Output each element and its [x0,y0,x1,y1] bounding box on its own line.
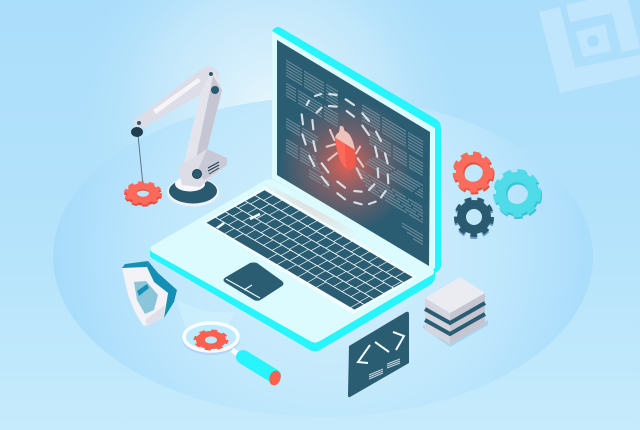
floor ellipse [53,97,593,417]
hanging gear [126,182,160,205]
shield top band [122,261,148,268]
magnifier [177,300,283,387]
keyboard [203,187,417,314]
server top [425,277,485,313]
lens [184,323,238,351]
server left side [425,298,450,344]
shield [122,261,177,326]
magnifier neck [232,350,246,359]
motor housing [178,149,227,187]
keyboard tray [203,187,417,314]
server shadow [423,320,488,347]
wrist [131,127,143,137]
laptop [150,27,441,352]
screen bezel [272,31,435,272]
dark gear [456,200,492,236]
bug icon [327,126,363,178]
screen back edge [272,27,441,273]
lens gear [196,331,226,349]
code symbol [358,332,404,363]
key notches [217,214,260,228]
keys [211,193,408,307]
forearm [134,66,221,129]
screen panel [277,40,430,266]
gears [455,154,540,236]
handle cap [267,369,283,387]
code card [348,312,409,397]
shield side [147,261,177,318]
magnifier shadow [182,323,240,355]
base top [150,179,434,342]
server stripes [425,303,485,334]
arm joints [211,86,219,94]
shield front [122,267,168,326]
robot arm [126,66,227,206]
upper arm [182,70,222,178]
base bottom edge [150,248,435,352]
cyan gear [496,172,540,216]
shield inner panel [134,281,158,314]
base glow [271,186,350,233]
watermark logo [539,0,640,93]
light beam [177,300,235,327]
shield inner stripe [137,284,149,296]
code caption lines [369,359,400,379]
target rings [302,94,388,204]
server stack [423,277,488,347]
code lines [286,59,423,245]
screen glow [282,101,410,226]
handle [243,357,274,376]
coral gear [455,154,492,192]
server right side [450,293,485,344]
robot base [167,178,219,206]
cable [138,135,143,185]
shield lower shade [145,305,165,326]
trackpad [224,262,284,301]
